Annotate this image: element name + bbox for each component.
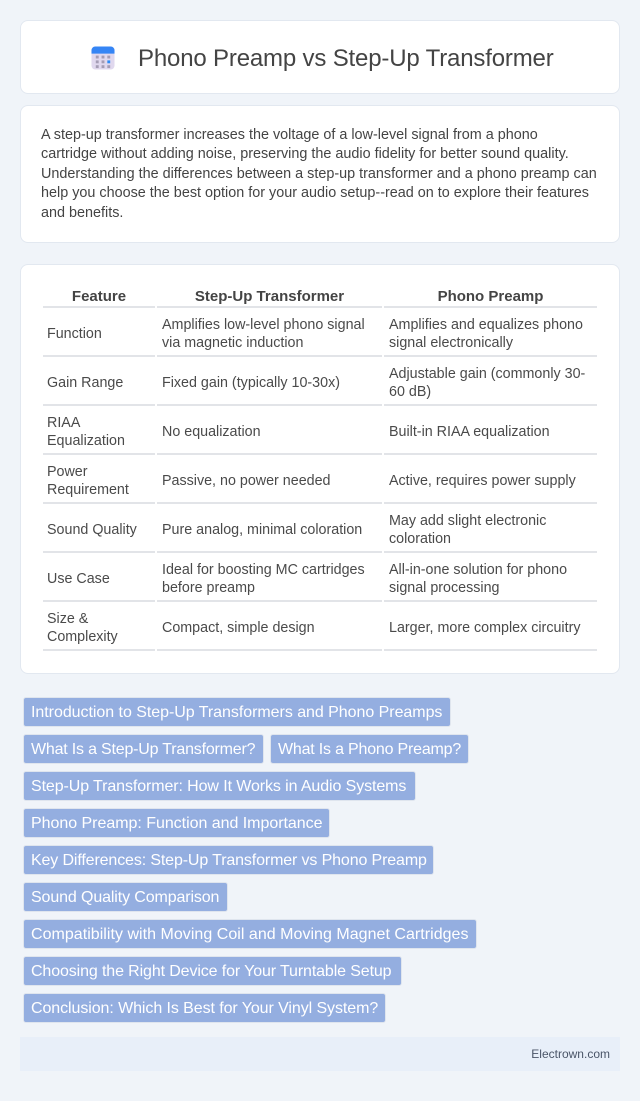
comparison table contents: Sound Quality [47,522,137,538]
comparison table contents: Compact, simple design [162,620,315,636]
comparison table contents: Larger, more complex circuitry [389,620,580,636]
comparison table contents: Complexity [47,629,118,645]
panel: comparison table [20,264,620,674]
comparison table contents: Amplifies and equalizes phono [389,317,583,333]
topic links: Phono Preamp: Function and Importance [31,815,323,832]
topic links: Step-Up Transformer: How It Works in Audio Systems [31,778,406,795]
comparison table contents: Pure analog, minimal coloration [162,522,362,538]
comparison table contents: via magnetic induction [162,335,303,351]
comparison table contents: Size & [47,611,88,627]
comparison table contents: Power [47,464,88,480]
comparison table contents: before preamp [162,580,255,596]
topic links: Key Differences: Step-Up Transformer vs Phono Preamp [31,852,427,869]
comparison table contents: signal electronically [389,335,513,351]
comparison table contents [43,288,597,651]
comparison table contents: May add slight electronic [389,513,546,529]
header card [20,20,620,94]
comparison table contents: Phono Preamp [438,288,543,305]
comparison table contents: Built-in RIAA equalization [389,424,550,440]
topic links: Compatibility with Moving Coil and Moving Magnet Cartridges [31,926,469,943]
topic links [23,697,477,1023]
comparison table contents: Gain Range [47,375,123,391]
topic links: Sound Quality Comparison [31,889,219,906]
intro paragraph: help you choose the best option for your audio setup--read on to explore their features [41,185,589,201]
comparison table contents: Feature [72,288,126,305]
intro paragraph: Understanding the differences between a step-up transformer and a phono preamp can [41,166,597,182]
comparison table contents: 60 dB) [389,384,431,400]
intro paragraph: cartridge without adding noise, preserving the audio fidelity for better sound quality. [41,146,569,162]
comparison table contents: Active, requires power supply [389,473,576,489]
comparison table contents: coloration [389,531,451,547]
topic links: Introduction to Step-Up Transformers and Phono Preamps [31,704,442,721]
intro paragraph: and benefits. [41,205,123,221]
topic links: What Is a Phono Preamp? [278,741,461,758]
title: Phono Preamp vs Step-Up Transformer [138,45,554,72]
intro text card [20,105,620,243]
comparison table contents: Equalization [47,433,125,449]
intro paragraph [41,127,597,221]
comparison table contents: All-in-one solution for phono [389,562,567,578]
intro paragraph: A step-up transformer increases the voltage of a low-level signal from a phono [41,127,538,143]
comparison table contents: Amplifies low-level phono signal [162,317,365,333]
comparison table contents: Passive, no power needed [162,473,330,489]
topic links: Choosing the Right Device for Your Turntable Setup [31,963,391,980]
comparison table contents: No equalization [162,424,261,440]
comparison table contents: Step-Up Transformer [195,288,344,305]
comparison table contents: RIAA [47,415,80,431]
topic links: Conclusion: Which Is Best for Your Vinyl System? [31,1000,378,1017]
comparison table contents: Function [47,326,102,342]
comparison table contents: Fixed gain (typically 10-30x) [162,375,340,391]
icon: calendar [91,46,115,70]
topic links: What Is a Step-Up Transformer? [31,741,255,758]
comparison table contents: Use Case [47,571,110,587]
comparison table contents: Ideal for boosting MC cartridges [162,562,365,578]
comparison table contents: Adjustable gain (commonly 30- [389,366,585,382]
footer [20,1037,620,1071]
comparison table contents: Requirement [47,482,129,498]
comparison table contents: signal processing [389,580,499,596]
footer credit: Electrown.com [531,1047,610,1061]
